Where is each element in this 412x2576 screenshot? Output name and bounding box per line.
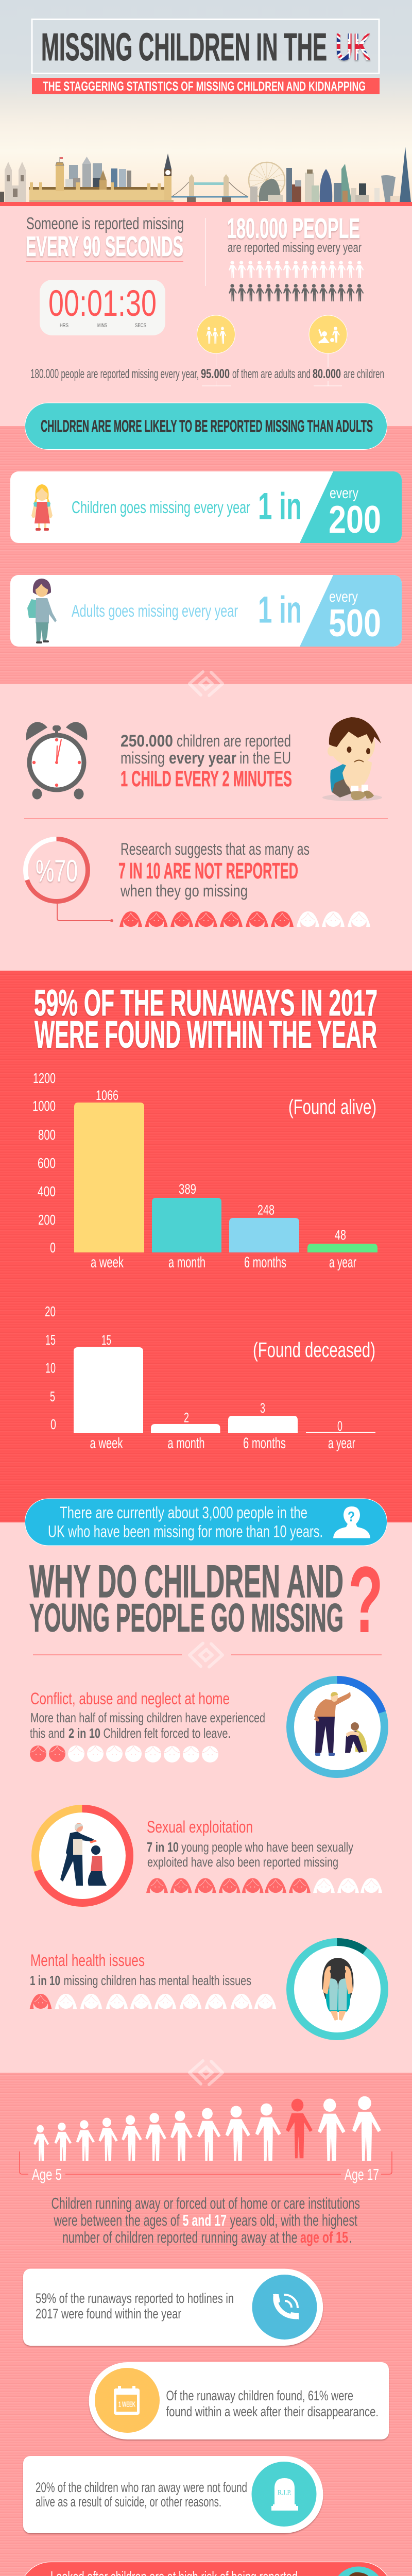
background: light pink why section bbox=[0, 1522, 412, 2073]
background: light pink EU section bbox=[0, 684, 412, 971]
panel: 180.000 people bbox=[227, 212, 364, 301]
card: not found alive: 20% of the children who ran away were not found bbox=[36, 2480, 247, 2495]
chart: found alive: 0 bbox=[50, 1240, 56, 1256]
row of white people bbox=[229, 261, 364, 278]
chart: found alive: 248 bbox=[258, 1202, 274, 1218]
heading: why do children go missing bbox=[29, 1547, 383, 1652]
chart: found alive: a month bbox=[168, 1254, 205, 1271]
panel: children 1 in 200: Children goes missing every year bbox=[72, 498, 250, 517]
stat: 250.000 children: children are reported bbox=[177, 732, 291, 750]
pictogram: 7 of 10 girls bbox=[119, 911, 370, 927]
chart: found alive: 800 bbox=[38, 1127, 56, 1143]
bar a month bbox=[152, 1198, 221, 1252]
icon: calendar bbox=[95, 2368, 160, 2433]
callout: 3,000 people missing: There are currently about 3,000 people in the bbox=[60, 1503, 307, 1522]
card: hotlines bbox=[23, 2269, 323, 2346]
chart: found deceased: a month bbox=[168, 1435, 205, 1452]
chart: found deceased: 2 bbox=[184, 1410, 189, 1425]
London skyline illustration bbox=[0, 147, 411, 202]
card: one week bbox=[89, 2362, 389, 2439]
background: red runaways section bbox=[0, 971, 412, 1522]
chart: 70 percent donut bbox=[26, 839, 113, 922]
chart: found deceased: 0 bbox=[337, 1418, 342, 1434]
card: hotlines: 2017 were found within the year bbox=[36, 2306, 181, 2321]
callout: looked after children bbox=[20, 2562, 392, 2576]
pictogram: 7 of 10 girls bbox=[146, 1878, 382, 1893]
panel: children 1 in 200: every bbox=[330, 485, 358, 502]
pictogram: children growing from age 5 to 17 bbox=[33, 2096, 381, 2161]
chart: found deceased: 20 bbox=[45, 1303, 56, 1319]
chart: found alive: 400 bbox=[38, 1183, 56, 1199]
icon: alarm clock bbox=[26, 722, 87, 800]
stat: 250.000 children: 250.000 bbox=[121, 732, 173, 750]
icon: waving child bbox=[330, 2567, 385, 2576]
chart: found deceased: 15 bbox=[45, 1332, 56, 1348]
bar 6 months bbox=[229, 1218, 299, 1252]
chart: found deceased: a year bbox=[328, 1435, 355, 1452]
panel: conflict, abuse and neglect: Conflict, abuse and neglect at home bbox=[30, 1689, 230, 1708]
paragraph: ages: . bbox=[349, 2228, 352, 2246]
panel: sexual exploitation: young people who have been sexually bbox=[181, 1839, 353, 1855]
heading: 59 percent of runaways bbox=[34, 983, 377, 1056]
body text: 1 in 10 bbox=[30, 1973, 60, 1988]
panel: conflict, abuse and neglect: Children felt forced to leave. bbox=[103, 1725, 231, 1741]
card: not found alive: alive as a result of suicide, or other reasons. bbox=[36, 2494, 221, 2510]
icon: unknown person: ? bbox=[348, 1509, 355, 1524]
panel: sexual exploitation: exploited have also been reported missing bbox=[147, 1854, 338, 1870]
chart: found alive: 1066 bbox=[96, 1088, 118, 1103]
panel: sexual exploitation: Sexual exploitation bbox=[147, 1818, 253, 1836]
chart: 70 percent donut: %70 bbox=[36, 854, 78, 888]
banner: children more likely bbox=[25, 403, 387, 449]
paragraph: ages: were between the ages of bbox=[54, 2211, 180, 2229]
stat: 250.000 children: every year bbox=[169, 749, 236, 767]
stat: 250.000 children: 1 CHILD EVERY 2 MINUTES bbox=[121, 767, 292, 791]
panel: adults 1 in 500: every bbox=[329, 588, 358, 605]
panel: every 90 seconds bbox=[26, 214, 184, 262]
icon: sad boy bbox=[322, 717, 382, 801]
timer card: MINS bbox=[97, 323, 107, 329]
icon: adults in yellow circle bbox=[197, 315, 235, 386]
statistic sentence: adults and children: 95.000 bbox=[201, 367, 230, 381]
divider logo bbox=[190, 672, 222, 696]
pictogram: 1 of 10 girls bbox=[30, 1994, 276, 2009]
paragraph: ages: 5 and 17 bbox=[183, 2211, 227, 2229]
stat: 7 in 10 not reported: when they go missing bbox=[120, 882, 248, 900]
row of grey people bbox=[229, 284, 364, 301]
age range bracket: Age 17 bbox=[345, 2165, 379, 2183]
panel: mental health issues: Mental health issues bbox=[30, 1951, 145, 1970]
panel: conflict, abuse and neglect: 2 in 10 bbox=[68, 1725, 100, 1741]
chart: found alive: 1200 bbox=[33, 1070, 56, 1086]
flag-filled UK word: UK bbox=[335, 25, 371, 69]
heading: why do children go missing: ? bbox=[348, 1547, 383, 1652]
stat: 250.000 children: in the EU bbox=[239, 749, 291, 767]
timer card: SECS bbox=[135, 323, 146, 329]
callout: 3,000 people missing: UK who have been missing for more than 10 years. bbox=[48, 1522, 323, 1541]
chart: found deceased: 10 bbox=[45, 1360, 56, 1376]
chart: found alive: 600 bbox=[38, 1155, 56, 1171]
timer card: HRS bbox=[60, 323, 68, 329]
stat: 250.000 children bbox=[121, 732, 292, 791]
callout: 3,000 people missing bbox=[25, 1499, 387, 1546]
panel: conflict, abuse and neglect bbox=[30, 1689, 265, 1762]
panel: adults 1 in 500: 500 bbox=[329, 601, 381, 645]
pictogram: 2 of 10 faces bbox=[30, 1745, 218, 1762]
timer card bbox=[40, 280, 165, 335]
background: textured pink ages section bbox=[0, 2073, 412, 2576]
icon: woman with backpack bbox=[27, 579, 57, 643]
panel: mental health issues bbox=[30, 1951, 276, 2009]
chart: found alive: 389 bbox=[179, 1181, 196, 1197]
chart: found deceased bbox=[45, 1303, 375, 1452]
panel: children 1 in 200 bbox=[10, 471, 402, 543]
statistic sentence: adults and children: of them are adults and bbox=[232, 367, 311, 381]
chart: found alive: 1000 bbox=[32, 1098, 56, 1114]
panel: children 1 in 200: 200 bbox=[329, 498, 381, 541]
panel: adults 1 in 500: Adults goes missing every year bbox=[72, 601, 238, 620]
paragraph: ages bbox=[52, 2194, 360, 2246]
chart: found deceased: 0 bbox=[50, 1416, 56, 1432]
title box bbox=[32, 20, 379, 73]
stat: 7 in 10 not reported: Research suggests that as many as bbox=[121, 840, 310, 858]
chart: found alive: (Found alive) bbox=[288, 1096, 376, 1118]
statistic sentence: adults and children: 80.000 bbox=[313, 367, 341, 381]
icon: phone bbox=[252, 2275, 317, 2340]
icon: children in yellow circle bbox=[309, 315, 347, 386]
chart: found alive: a year bbox=[329, 1254, 356, 1271]
paragraph: ages: years old, with the highest bbox=[230, 2211, 357, 2229]
icon: unknown person bbox=[333, 1506, 370, 1538]
panel: every 90 seconds: Someone is reported missing bbox=[26, 214, 184, 233]
icon: calendar: 1 WEEK bbox=[118, 2400, 135, 2409]
body text: More than half of missing children have experienced bbox=[30, 1710, 265, 1725]
bar a year bbox=[307, 1244, 377, 1252]
panel: adults 1 in 500: 1 in bbox=[258, 589, 302, 631]
icon: gravestone: R.I.P. bbox=[278, 2489, 291, 2497]
paragraph: ages: age of 15 bbox=[300, 2228, 348, 2246]
divider logo bbox=[190, 2061, 222, 2084]
chart: found deceased: 6 months bbox=[243, 1435, 286, 1452]
big statement: EVERY 90 SECONDS bbox=[26, 230, 183, 262]
icon: gravestone bbox=[251, 2462, 316, 2527]
chart: found deceased: 5 bbox=[50, 1388, 55, 1404]
panel: adults 1 in 500 bbox=[10, 575, 402, 647]
age range bracket: Age 5 bbox=[32, 2165, 62, 2183]
paragraph: ages: number of children reported running away at the bbox=[62, 2228, 298, 2246]
chart: found alive: a week bbox=[91, 1254, 124, 1271]
panel: conflict, abuse and neglect: this and bbox=[30, 1725, 65, 1741]
divider logo bbox=[190, 1643, 222, 1667]
icon: exploitation illustration in ring bbox=[35, 1808, 130, 1903]
background: sky bbox=[0, 0, 412, 202]
statistic sentence: adults and children: are children bbox=[344, 367, 384, 381]
chart: found deceased: a week bbox=[90, 1435, 123, 1452]
panel: children 1 in 200: 1 in bbox=[258, 486, 302, 528]
red band under skyline bbox=[0, 202, 412, 206]
panel: sexual exploitation bbox=[146, 1818, 382, 1893]
timer card: 00:01:30 bbox=[48, 283, 157, 324]
chart: found alive: 6 months bbox=[244, 1254, 286, 1271]
chart: found deceased: 3 bbox=[260, 1400, 265, 1416]
icon: distressed girl in ring bbox=[290, 1942, 384, 2036]
chart: found alive bbox=[32, 1070, 377, 1271]
card: not found alive bbox=[23, 2456, 323, 2533]
icon: conflict illustration in ring bbox=[290, 1680, 384, 1774]
statistic sentence: adults and children: 180.000 people are reported missing every year, bbox=[30, 367, 199, 381]
panel: mental health issues: missing children has mental health issues bbox=[64, 1973, 251, 1988]
icon: girl bbox=[31, 484, 53, 531]
card: hotlines: 59% of the runaways reported to hotlines in bbox=[36, 2291, 234, 2306]
bar a week bbox=[74, 1103, 144, 1252]
stat: 7 in 10 not reported bbox=[118, 840, 310, 900]
background: textured pink comparison section bbox=[0, 426, 412, 684]
chart: found alive: 48 bbox=[335, 1227, 346, 1243]
background: light pink top section bbox=[0, 202, 412, 426]
chart: found deceased: 15 bbox=[101, 1332, 111, 1348]
age range bracket bbox=[20, 2151, 392, 2183]
body text: 7 in 10 bbox=[147, 1839, 179, 1855]
caption: are reported missing every year bbox=[228, 240, 362, 255]
stat: 250.000 children: missing bbox=[121, 749, 165, 767]
chart: found alive: 200 bbox=[38, 1212, 56, 1228]
